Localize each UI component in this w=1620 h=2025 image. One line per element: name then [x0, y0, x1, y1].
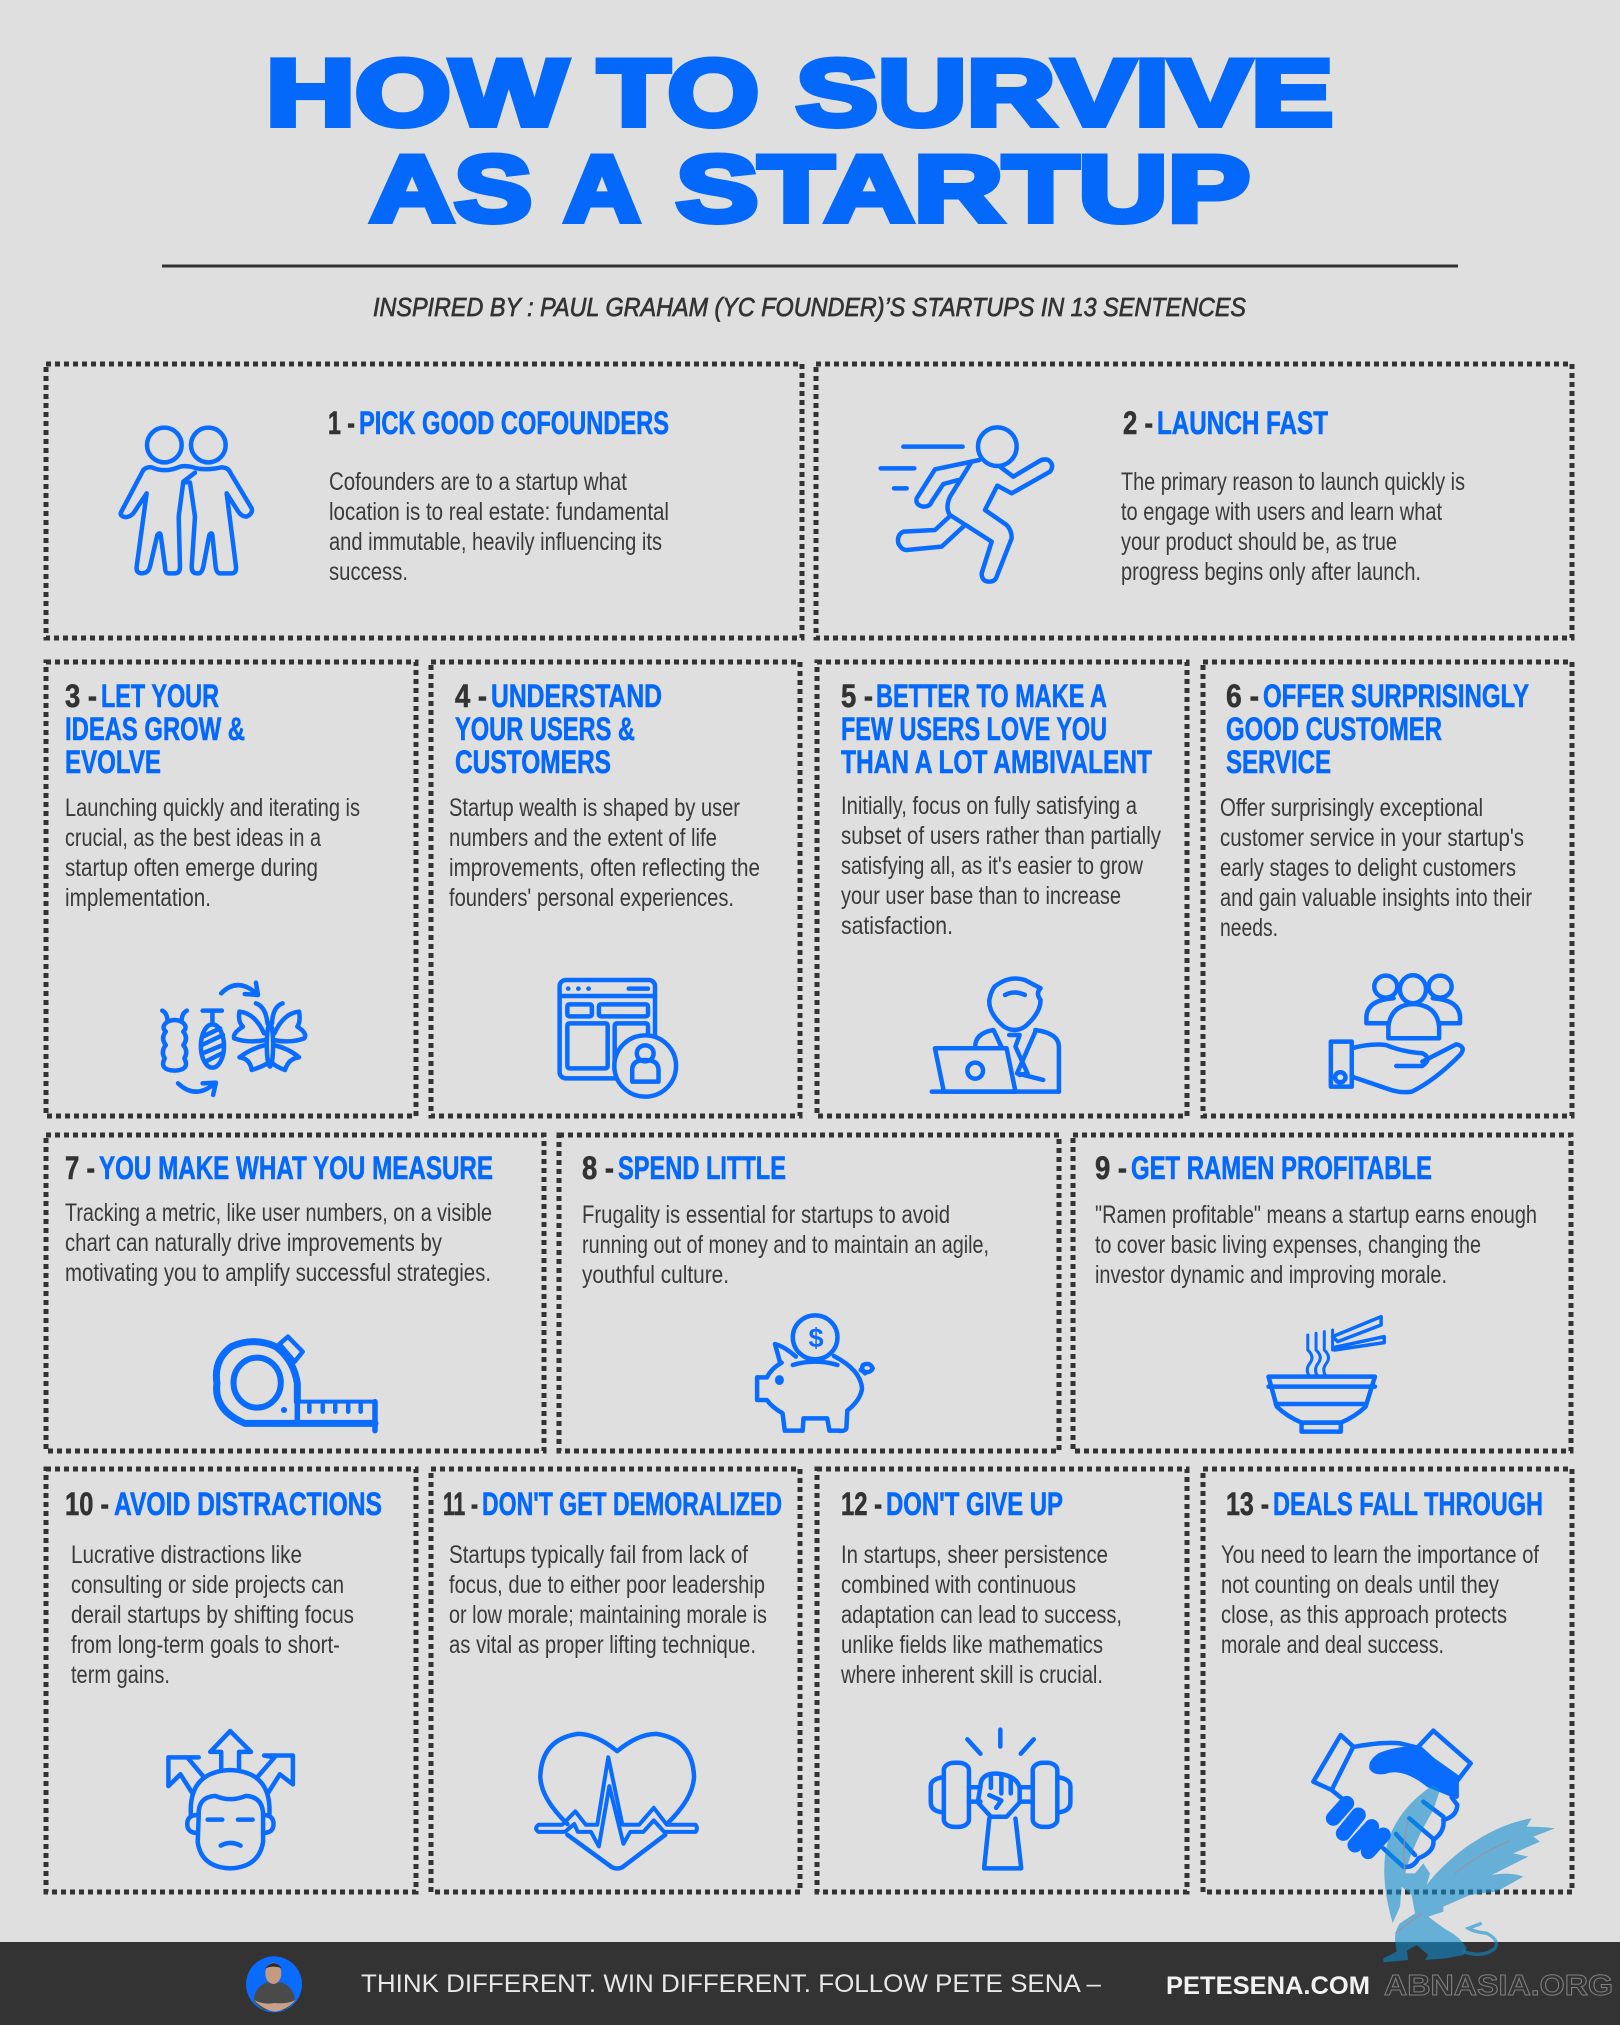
- body text 1: and immutable, heavily influencing its: [329, 528, 662, 556]
- body text 1: location is to real estate: fundamental: [329, 498, 669, 526]
- heading 13: 13 -: [1226, 1486, 1269, 1522]
- heading 2: LAUNCH FAST: [1157, 405, 1328, 441]
- heading 4: YOUR USERS &: [455, 711, 635, 747]
- body text 5: subset of users rather than partially: [841, 822, 1161, 850]
- body text 2: progress begins only after launch.: [1121, 558, 1421, 586]
- body text 9: [1095, 1201, 1537, 1289]
- panel: 10 avoid distractions: [46, 1469, 416, 1892]
- heading 12: DON'T GIVE UP: [886, 1486, 1063, 1522]
- body text 10: consulting or side projects can: [71, 1571, 344, 1599]
- heading 7: YOU MAKE WHAT YOU MEASURE: [99, 1150, 493, 1186]
- body text 6: and gain valuable insights into their: [1220, 884, 1532, 912]
- heading 4: CUSTOMERS: [455, 744, 611, 780]
- icon: man at laptop: [932, 978, 1059, 1092]
- panel: 2 launch fast: [816, 364, 1572, 638]
- body text 2: [1121, 468, 1465, 586]
- body text 4: [449, 794, 760, 912]
- body text 5: Initially, focus on fully satisfying a: [841, 792, 1137, 820]
- heading 6: [1226, 678, 1529, 780]
- body text 2: The primary reason to launch quickly is: [1121, 468, 1465, 496]
- title: TO: [598, 40, 759, 145]
- icon: browser window with user: [560, 980, 676, 1097]
- body text 6: needs.: [1220, 914, 1278, 942]
- heading 3: LET YOUR: [101, 678, 219, 714]
- title: STARTUP: [676, 136, 1250, 241]
- body text 9: to cover basic living expenses, changing the: [1095, 1231, 1481, 1259]
- heading 6: 6 -: [1226, 678, 1259, 714]
- body text 11: focus, due to either poor leadership: [449, 1571, 765, 1599]
- heading 3: EVOLVE: [65, 744, 161, 780]
- body text 13: [1221, 1541, 1539, 1659]
- heading 9: 9 -: [1095, 1150, 1127, 1186]
- heading 8: 8 -: [582, 1150, 614, 1186]
- body text 11: or low morale; maintaining morale is: [449, 1601, 767, 1629]
- body text 4: numbers and the extent of life: [449, 824, 717, 852]
- body text 5: your user base than to increase: [841, 882, 1121, 910]
- icon: heart with pulse: [536, 1734, 697, 1869]
- body text 2: your product should be, as true: [1121, 528, 1397, 556]
- heading 1: [328, 405, 669, 441]
- title: AS: [370, 136, 532, 241]
- panel: 9 get ramen profitable: [1073, 1135, 1571, 1451]
- icon: distracted head with arrows: [168, 1731, 293, 1868]
- body text 6: [1220, 794, 1532, 942]
- body text 10: [71, 1541, 354, 1689]
- body text 11: [449, 1541, 767, 1659]
- watermark wordmark: ABNASIA.ORG: [1384, 1970, 1613, 2002]
- body text 6: customer service in your startup's: [1220, 824, 1524, 852]
- body text 6: Offer surprisingly exceptional: [1220, 794, 1483, 822]
- body text 12: In startups, sheer persistence: [841, 1541, 1108, 1569]
- heading 5: THAN A LOT AMBIVALENT: [841, 744, 1152, 780]
- body text 8: youthful culture.: [582, 1261, 729, 1289]
- heading 4: UNDERSTAND: [491, 678, 662, 714]
- heading 2: [1123, 405, 1328, 441]
- heading 13: [1226, 1486, 1543, 1522]
- panel: 1 pick good cofounders: [46, 364, 802, 638]
- heading 11: [443, 1486, 782, 1522]
- body text 12: combined with continuous: [841, 1571, 1076, 1599]
- icon: hand holding group: [1331, 975, 1463, 1092]
- subtitle: INSPIRED BY : PAUL GRAHAM (YC FOUNDER)’S STARTUPS IN 13 SENTENCES: [373, 292, 1247, 322]
- panel: 12 don't give up: [817, 1469, 1187, 1892]
- body text 11: as vital as proper lifting technique.: [449, 1631, 756, 1659]
- heading 12: [841, 1486, 1063, 1522]
- body text 5: [841, 792, 1161, 940]
- panel: 4 understand your users: [431, 662, 800, 1116]
- heading 3: 3 -: [65, 678, 97, 714]
- title: HOW: [266, 40, 567, 145]
- title: A: [564, 136, 640, 241]
- icon: piggy bank with coin: $: [808, 1323, 824, 1353]
- body text 7: Tracking a metric, like user numbers, on a visible: [65, 1199, 492, 1227]
- icon: handshake: [1313, 1731, 1471, 1867]
- body text 1: Cofounders are to a startup what: [329, 468, 627, 496]
- body text 3: startup often emerge during: [65, 854, 318, 882]
- body text 4: improvements, often reflecting the: [449, 854, 760, 882]
- icon: measuring tape: [216, 1337, 375, 1431]
- heading 1: 1 -: [328, 405, 355, 441]
- body text 8: Frugality is essential for startups to avoid: [582, 1201, 950, 1229]
- panel: 6 offer surprisingly good customer service: [1203, 662, 1572, 1116]
- title: SURVIVE: [796, 40, 1333, 145]
- panel: 3 let your ideas grow: [46, 662, 416, 1116]
- body text 11: Startups typically fail from lack of: [449, 1541, 748, 1569]
- panel: 11 don't get demoralized: [431, 1469, 800, 1892]
- heading 9: GET RAMEN PROFITABLE: [1131, 1150, 1432, 1186]
- body text 6: early stages to delight customers: [1220, 854, 1516, 882]
- heading 11: 11 -: [443, 1486, 478, 1522]
- body text 10: term gains.: [71, 1661, 170, 1689]
- heading 4: 4 -: [455, 678, 487, 714]
- body text 2: to engage with users and learn what: [1121, 498, 1442, 526]
- icon: running person: [881, 427, 1052, 582]
- body text 10: Lucrative distractions like: [71, 1541, 302, 1569]
- body text 4: founders' personal experiences.: [449, 884, 734, 912]
- body text 5: satisfaction.: [841, 912, 953, 940]
- body text 3: Launching quickly and iterating is: [65, 794, 360, 822]
- icon: caterpillar to butterfly: [162, 983, 305, 1095]
- body text 13: morale and deal success.: [1221, 1631, 1444, 1659]
- body text 12: [840, 1541, 1122, 1689]
- avatar: portrait: [246, 1956, 302, 2012]
- heading 5: BETTER TO MAKE A: [876, 678, 1107, 714]
- body text 4: Startup wealth is shaped by user: [449, 794, 740, 822]
- heading 5: FEW USERS LOVE YOU: [841, 711, 1107, 747]
- body text 3: [65, 794, 360, 912]
- heading 5: 5 -: [841, 678, 873, 714]
- heading 9: [1095, 1150, 1432, 1186]
- heading 2: 2 -: [1123, 405, 1153, 441]
- body text 13: You need to learn the importance of: [1221, 1541, 1539, 1569]
- body text 7: [65, 1199, 492, 1287]
- body text 1: [329, 468, 669, 586]
- body text 1: success.: [329, 558, 408, 586]
- body text 9: investor dynamic and improving morale.: [1095, 1261, 1447, 1289]
- body text 3: implementation.: [65, 884, 211, 912]
- heading 12: 12 -: [841, 1486, 882, 1522]
- body text 5: satisfying all, as it's easier to grow: [841, 852, 1144, 880]
- heading 6: SERVICE: [1226, 744, 1331, 780]
- heading 10: 10 -: [65, 1486, 109, 1522]
- heading 8: [582, 1150, 786, 1186]
- body text 12: where inherent skill is crucial.: [840, 1661, 1103, 1689]
- body text 7: motivating you to amplify successful strategies.: [65, 1259, 491, 1287]
- panel: 5 better to make a few users love you: [817, 662, 1187, 1116]
- heading 1: PICK GOOD COFOUNDERS: [359, 405, 669, 441]
- heading 7: 7 -: [65, 1150, 95, 1186]
- footer bar: [0, 1942, 1620, 2025]
- body text 10: derail startups by shifting focus: [71, 1601, 354, 1629]
- body text 8: [582, 1201, 989, 1289]
- heading 6: OFFER SURPRISINGLY: [1263, 678, 1529, 714]
- heading 10: AVOID DISTRACTIONS: [114, 1486, 382, 1522]
- heading 11: DON'T GET DEMORALIZED: [482, 1486, 782, 1522]
- body text 10: from long-term goals to short-: [71, 1631, 340, 1659]
- body text 7: chart can naturally drive improvements by: [65, 1229, 442, 1257]
- footer tagline: THINK DIFFERENT. WIN DIFFERENT. FOLLOW PETE SENA –: [361, 1970, 1101, 1998]
- heading 8: SPEND LITTLE: [618, 1150, 786, 1186]
- icon: fist with dumbbell: [931, 1730, 1070, 1868]
- heading 4: [455, 678, 662, 780]
- icon: ramen bowl: [1269, 1317, 1384, 1432]
- body text 3: crucial, as the best ideas in a: [65, 824, 321, 852]
- heading 10: [65, 1486, 382, 1522]
- heading 5: [841, 678, 1152, 780]
- body text 12: unlike fields like mathematics: [841, 1631, 1103, 1659]
- body text 13: close, as this approach protects: [1221, 1601, 1507, 1629]
- panel: 7 you make what you measure: [46, 1135, 544, 1451]
- body text 12: adaptation can lead to success,: [841, 1601, 1122, 1629]
- panel: 13 deals fall through: [1203, 1469, 1572, 1892]
- heading 3: IDEAS GROW &: [65, 711, 245, 747]
- body text 8: running out of money and to maintain an agile,: [582, 1231, 989, 1259]
- title: [266, 40, 1333, 241]
- watermark: quill and lion logo: [1383, 1785, 1555, 1962]
- icon: two cofounders: [121, 428, 252, 573]
- body text 13: not counting on deals until they: [1221, 1571, 1499, 1599]
- heading 3: [65, 678, 245, 780]
- icon: piggy bank with coin: [757, 1315, 873, 1431]
- panel: 8 spend little: [559, 1135, 1059, 1451]
- footer website: PETESENA.COM: [1166, 1972, 1370, 2000]
- heading 6: GOOD CUSTOMER: [1226, 711, 1442, 747]
